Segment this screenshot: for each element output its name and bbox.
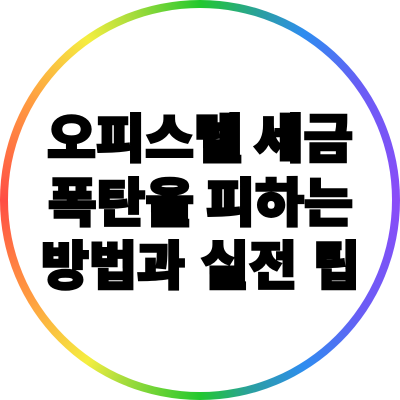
title line 3: 방법과 bbox=[41, 238, 185, 296]
title line 2: 폭탄을 bbox=[48, 176, 194, 234]
title line 1: 세금 bbox=[254, 112, 353, 170]
title line 3 bbox=[41, 237, 360, 296]
title line 3: 실전 bbox=[201, 238, 297, 296]
title line 2 bbox=[48, 176, 353, 234]
title line 2: 피하는 bbox=[206, 176, 353, 234]
title line 1: 오피스텔 bbox=[47, 112, 243, 170]
title line 1 bbox=[47, 112, 353, 170]
title line 3: 팁 bbox=[313, 237, 360, 296]
